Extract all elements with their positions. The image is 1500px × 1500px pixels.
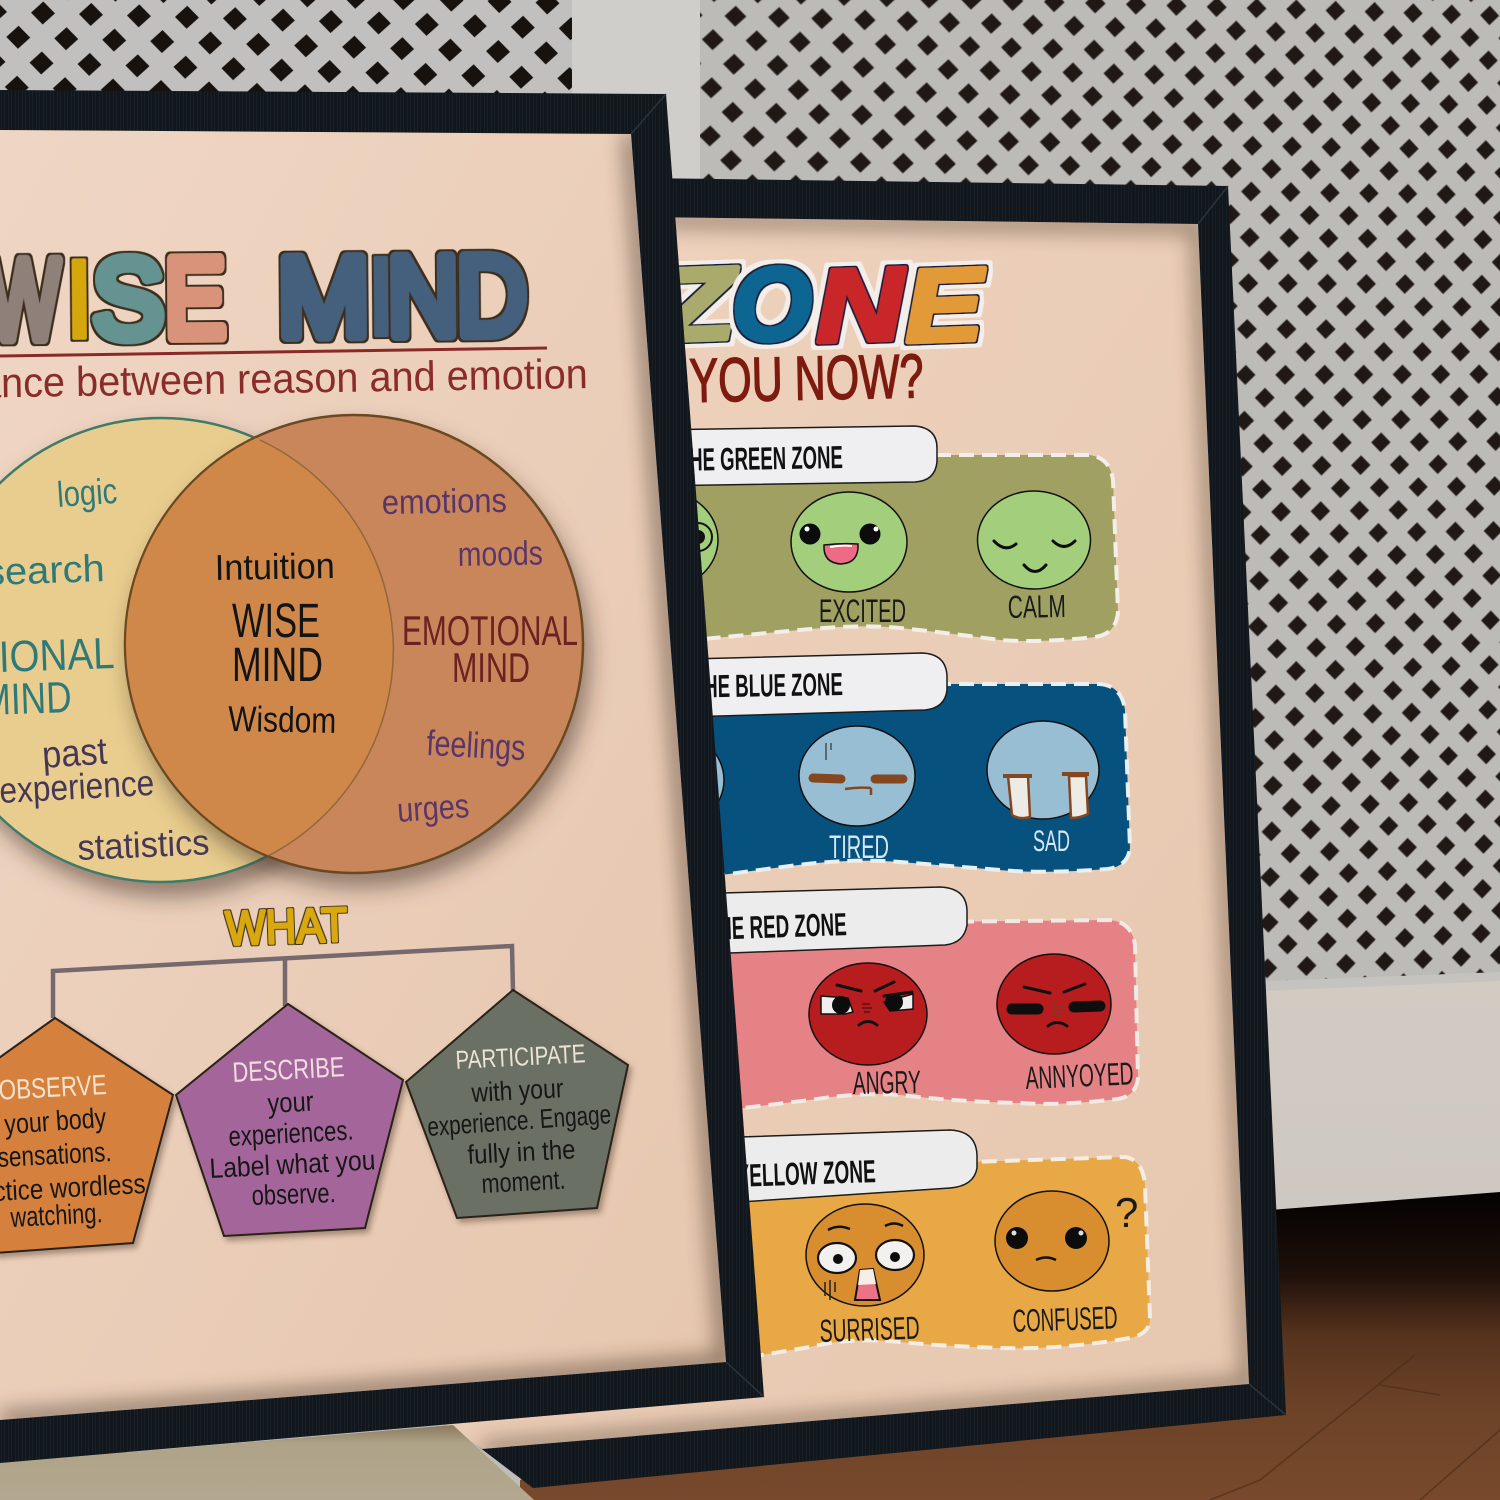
title: ZONE xyxy=(653,245,988,364)
title: WISE MIND xyxy=(0,233,527,363)
title: WISE MIND: E xyxy=(164,235,226,361)
wooden floor xyxy=(520,1192,1500,1500)
wise mind words: Wisdom xyxy=(228,698,337,741)
beige object on floor xyxy=(0,1425,534,1500)
pentagon: participate xyxy=(406,990,628,1218)
rational mind words: logic xyxy=(56,470,118,515)
title: ZONE: E xyxy=(903,246,988,364)
pentagon: participate: with your xyxy=(470,1073,564,1108)
face: sad xyxy=(987,721,1099,819)
emotional mind words: emotions xyxy=(381,482,507,522)
pentagon: observe: OBSERVE xyxy=(0,1069,107,1106)
pentagon: observe: your body xyxy=(3,1102,107,1140)
title: ZONE: O xyxy=(730,245,814,363)
pentagon: describe: experiences. xyxy=(228,1114,354,1152)
wall panel: perforated radiator cover xyxy=(700,0,1500,980)
label: the red zone: THE RED ZONE xyxy=(706,906,847,947)
title: ZONE: Z xyxy=(653,245,742,363)
pentagon: observe: watching. xyxy=(9,1197,103,1233)
wall stile between panels xyxy=(572,0,700,300)
label: angry: ANGRY xyxy=(852,1064,921,1101)
pentagon: observe xyxy=(0,1018,173,1253)
wise mind words: Intuition xyxy=(214,545,335,588)
label: the blue zone xyxy=(650,653,947,718)
poster frame: wise mind xyxy=(0,90,764,1463)
pentagon: participate: moment. xyxy=(481,1165,566,1199)
label: the yellow zone: THE YELLOW ZONE xyxy=(693,1153,876,1195)
face: tired xyxy=(799,726,915,826)
label: excited: EXCITED xyxy=(819,593,906,629)
pentagon: describe: your xyxy=(267,1086,314,1119)
face: annoyed xyxy=(997,954,1111,1054)
wise mind words xyxy=(214,545,337,741)
label: the red zone xyxy=(650,887,967,956)
title: WISE MIND: I xyxy=(365,234,397,359)
pentagon: participate: fully in the xyxy=(467,1134,576,1170)
tree connector xyxy=(53,946,513,1018)
emotional mind words: feelings xyxy=(426,722,527,768)
poster frame: zones xyxy=(450,178,1286,1488)
wise mind words: WISE xyxy=(232,595,320,648)
venn diagram: past xyxy=(41,731,109,777)
face: confused xyxy=(995,1191,1109,1291)
pentagon: describe: observe. xyxy=(251,1177,336,1211)
overlap: wise mind xyxy=(126,438,392,856)
face: angry xyxy=(809,963,927,1065)
pentagon: participate: PARTICIPATE xyxy=(455,1038,586,1075)
circle: emotional mind xyxy=(125,415,583,873)
label: sad: SAD xyxy=(1033,825,1070,858)
venn diagram: EMOTIONAL xyxy=(402,607,578,654)
inner shadow: wise mind poster xyxy=(0,134,726,1420)
title: WISE MIND: S xyxy=(92,236,164,362)
label: surprised: SURRISED xyxy=(819,1310,920,1349)
panel: blue zone xyxy=(610,653,1130,883)
venn diagram: experience xyxy=(0,762,155,811)
emotional mind words: urges xyxy=(396,787,470,830)
face: hidden left xyxy=(602,490,718,590)
face: hidden left xyxy=(610,730,724,830)
pentagon: participate: experience. Engage xyxy=(426,1099,612,1142)
icon: question mark: ? xyxy=(1115,1189,1138,1236)
title: WISE MIND: N xyxy=(387,233,459,359)
overlap edge xyxy=(260,440,393,856)
subtitle: you now: YOU NOW? xyxy=(689,342,924,416)
poster sheet: zones xyxy=(440,217,1249,1449)
rational mind words xyxy=(0,470,118,725)
title: WISE MIND: M xyxy=(277,234,370,360)
label: calm: CALM xyxy=(1007,588,1066,625)
label: the blue zone: THE BLUE ZONE xyxy=(693,666,843,705)
label: the green zone xyxy=(650,426,937,486)
title: WISE MIND: D xyxy=(456,233,527,358)
pentagon: describe: DESCRIBE xyxy=(232,1051,345,1088)
heading: WHAT: WHAT xyxy=(225,899,348,956)
pentagon: describe xyxy=(176,1004,403,1236)
label: the yellow zone xyxy=(650,1130,977,1208)
panel: green zone xyxy=(602,426,1118,643)
label: confused: CONFUSED xyxy=(1012,1299,1118,1339)
venn diagram: MIND xyxy=(452,644,530,691)
venn diagram: statistics xyxy=(77,821,210,868)
left wall panel strip xyxy=(0,0,572,110)
emotional mind words: moods xyxy=(457,535,543,574)
inner shadow: zones poster xyxy=(482,220,1249,1449)
title: WISE MIND: I xyxy=(63,237,95,362)
face: calm xyxy=(978,491,1090,589)
venn diagram xyxy=(0,415,583,882)
face: excited xyxy=(791,492,907,592)
plinth below the panel xyxy=(1240,972,1500,1210)
title: ZONE: N xyxy=(814,246,909,364)
emotional mind words xyxy=(381,482,543,830)
pentagon: observe: sensations. xyxy=(0,1136,112,1173)
pentagon: describe: Label what you xyxy=(209,1144,376,1184)
poster sheet: wise mind xyxy=(0,130,726,1420)
panel: yellow zone xyxy=(650,1130,1150,1372)
title underline xyxy=(0,348,547,356)
label: the green zone: THE GREEN ZONE xyxy=(678,439,843,478)
wise mind words: MIND xyxy=(232,639,323,692)
panel: red zone xyxy=(650,887,1138,1118)
label: annoyed: ANNYOYED xyxy=(1025,1055,1134,1096)
label: tired: TIRED xyxy=(829,829,889,865)
circle: rational mind xyxy=(0,418,393,882)
face: surprised xyxy=(806,1204,924,1306)
